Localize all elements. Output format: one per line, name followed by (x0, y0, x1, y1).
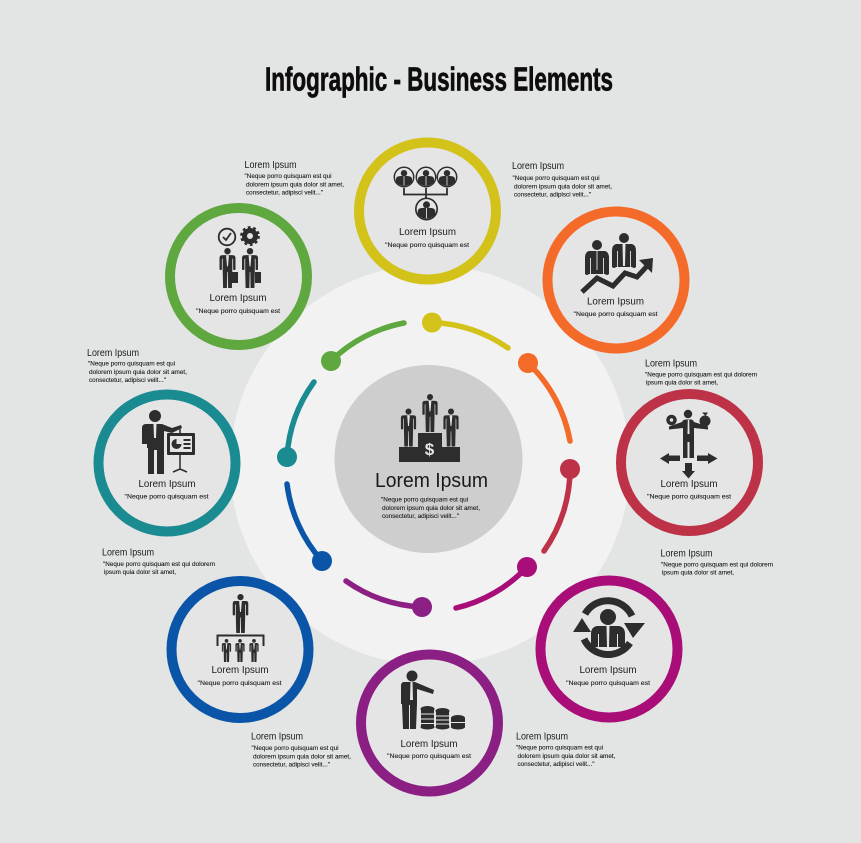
label: Lorem Ipsum (399, 226, 456, 238)
text block: right lower: ipsum quia dolor sit amet, (662, 570, 734, 576)
text block: top right: consectetur, adipisci velit..." (514, 192, 592, 198)
ring segment: red (544, 459, 580, 551)
centre body text: "Neque porro quisquam est qui (381, 496, 468, 504)
text block: right lower: "Neque porro quisquam est qui dolorem (661, 562, 773, 568)
text block: bottom left: consectetur, adipisci velit..." (253, 762, 331, 768)
text block: top right (512, 160, 612, 198)
text block: right lower: Lorem Ipsum (660, 548, 713, 560)
label: Lorem Ipsum (660, 478, 718, 490)
ring segment: magenta (456, 557, 537, 608)
segmented ring (277, 312, 580, 617)
label: Lorem Ipsum (587, 296, 644, 308)
text block: top right: dolorem ipsum quia dolor sit amet, (514, 184, 612, 190)
icon: clock and gear with two people (219, 227, 261, 288)
text block: bottom right: "Neque porro quisquam est qui (516, 744, 603, 752)
panel: yellow circle (359, 142, 496, 280)
text block: bottom right: Lorem Ipsum (516, 730, 568, 742)
sub label: "Neque porro quisquam est (196, 308, 280, 315)
text block: right lower (660, 548, 773, 576)
ring segment: blue (287, 484, 332, 571)
ring segment: green (321, 323, 404, 371)
text block: top right: "Neque porro quisquam est qui (512, 175, 600, 182)
panel: teal circle (98, 394, 236, 532)
ring segment: yellow (422, 312, 508, 348)
icon: podium with three people (399, 394, 460, 462)
sub label: "Neque porro quisquam est (387, 753, 471, 760)
icon: person with circular arrows (573, 601, 645, 655)
text block: bottom left: Lorem Ipsum (251, 730, 303, 742)
text block: left: consectetur, adipisci velit..." (89, 377, 167, 384)
sub label: "Neque porro quisquam est (566, 680, 650, 687)
text block: right upper (645, 358, 757, 386)
centre body text: dolorem ipsum quia dolor sit amet, (382, 505, 480, 512)
large light circle (230, 265, 630, 665)
text block: top left: consectetur, adipisci velit..." (246, 190, 324, 196)
panel: orange circle (548, 212, 684, 348)
panel: blue circle (172, 581, 308, 718)
ring segment: orange (518, 353, 570, 441)
text block: top left (244, 159, 344, 196)
panel: red circle (621, 394, 758, 531)
text block: right upper: "Neque porro quisquam est qui dolorem (645, 372, 757, 378)
centre panel (334, 365, 522, 553)
text block: top right: Lorem Ipsum (512, 160, 564, 172)
centre heading: Lorem Ipsum (375, 470, 488, 492)
sub label: "Neque porro quisquam est (385, 242, 469, 249)
text block: bottom left: "Neque porro quisquam est qui (252, 745, 339, 752)
panel: purple circle (361, 654, 498, 792)
text block: bottom left (251, 730, 351, 768)
text block: bottom left: dolorem ipsum quia dolor sit amet, (253, 753, 351, 760)
text block: left lower: Lorem Ipsum (102, 546, 154, 558)
text block: top left: "Neque porro quisquam est qui (244, 173, 332, 180)
label: Lorem Ipsum (400, 738, 458, 750)
ring segment: teal (277, 382, 314, 467)
sub label: "Neque porro quisquam est (124, 494, 209, 500)
icon: people with rising arrow (582, 233, 653, 292)
text block: left lower (102, 546, 215, 576)
text block: left: "Neque porro quisquam est qui (88, 360, 175, 368)
panel: magenta circle (540, 580, 678, 718)
text block: left (87, 347, 187, 384)
sub label: "Neque porro quisquam est (647, 494, 731, 500)
text block: left lower: "Neque porro quisquam est qui dolorem (103, 561, 215, 568)
icon: person with coin stacks (401, 670, 465, 730)
text block: bottom right: dolorem ipsum quia dolor sit amet, (518, 753, 616, 760)
icon: presenter with board (142, 410, 195, 474)
text block: top left: dolorem ipsum quia dolor sit amet, (246, 181, 344, 188)
sub label: "Neque porro quisquam est (574, 311, 658, 318)
text block: top left: Lorem Ipsum (244, 159, 297, 171)
panel: green circle (170, 208, 307, 345)
label: Lorem Ipsum (210, 292, 267, 304)
label: Lorem Ipsum (580, 664, 637, 676)
label: Lorem Ipsum (212, 664, 269, 676)
ring segment: purple (346, 581, 432, 617)
icon: manager and team (218, 594, 264, 662)
text block: right upper: Lorem Ipsum (645, 358, 697, 370)
centre body text (381, 496, 480, 520)
title: Infographic - Business Elements (265, 60, 613, 98)
text block: bottom right: consectetur, adipisci velit..." (518, 761, 595, 768)
icon: podium with three people: $ (425, 440, 435, 459)
icon: team hierarchy (394, 167, 457, 220)
sub label: "Neque porro quisquam est (198, 680, 282, 687)
centre body text: consectetur, adipisci velit..." (382, 513, 460, 520)
icon: person with choices (660, 410, 718, 478)
text block: left lower: ipsum quia dolor sit amet, (104, 569, 176, 576)
text block: left: dolorem ipsum quia dolor sit amet, (89, 369, 187, 376)
text block: left: Lorem Ipsum (87, 347, 139, 359)
text block: right upper: ipsum quia dolor sit amet, (646, 380, 718, 386)
label: Lorem Ipsum (138, 478, 196, 490)
text block: bottom right (516, 730, 616, 768)
